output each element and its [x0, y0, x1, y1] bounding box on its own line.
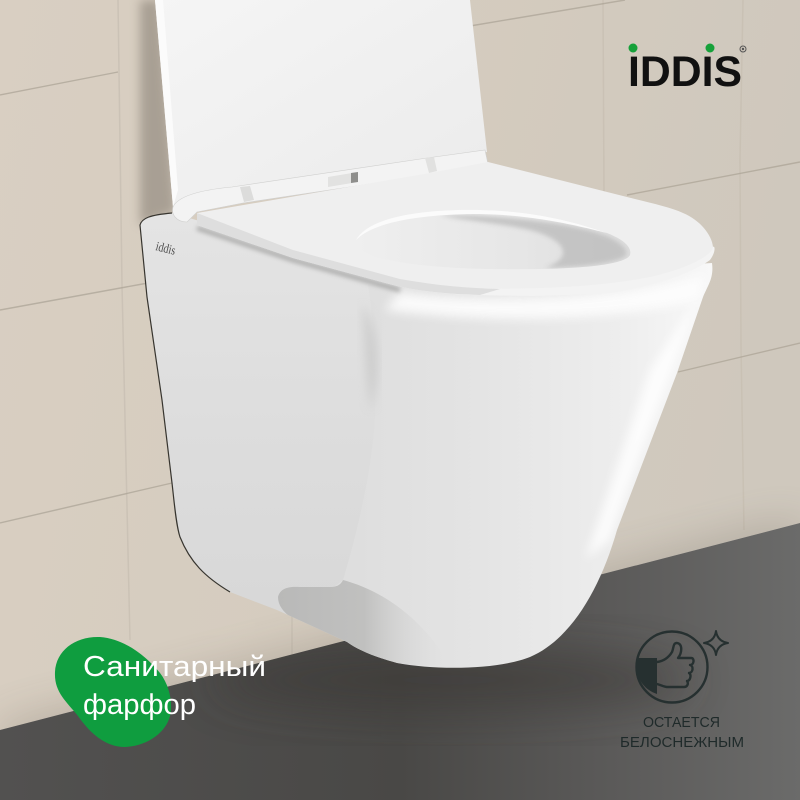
shadow under seat [197, 228, 400, 290]
icon caption [620, 715, 744, 751]
opening lip [356, 210, 607, 240]
thumb cuff [637, 658, 657, 694]
badge text: фарфор [83, 689, 196, 721]
green blob badge [55, 637, 171, 747]
icon caption: ОСТАЕТСЯ [643, 715, 720, 731]
bowl highlights [278, 275, 705, 666]
seat side shade [197, 213, 500, 295]
back plate [140, 213, 420, 642]
toilet: hinge bar [173, 150, 488, 222]
plate outline [140, 213, 230, 592]
opening inner shadow [440, 215, 626, 268]
seam reflection [362, 305, 377, 410]
lid shadow on wall [140, 0, 176, 225]
registered mark [740, 46, 746, 52]
bowl body [330, 263, 712, 668]
toilet: raised lid [155, 0, 487, 207]
seat top surface [197, 162, 713, 289]
badge text [83, 651, 266, 721]
seat front edge [197, 213, 715, 296]
bowl rim highlight [388, 288, 686, 320]
background: concrete floor [0, 523, 800, 800]
toilet: back plate and bowl [140, 213, 712, 668]
toilet: seat [197, 162, 715, 296]
seat opening [356, 210, 630, 269]
sparkle [704, 631, 728, 655]
logo wordmark: IDDIS [628, 48, 742, 96]
icon: thumbs up in circle with sparkle [636, 631, 728, 702]
thumb hand [657, 643, 694, 687]
logo on ceramic: iddis [154, 238, 177, 258]
icon caption: БЕЛОСНЕЖНЫМ [620, 735, 744, 751]
bowl lower reflection [278, 580, 408, 664]
brand logo [628, 44, 746, 96]
logo green dots [628, 44, 714, 52]
badge text: Санитарный [83, 651, 266, 683]
bowl right highlight [592, 351, 672, 550]
